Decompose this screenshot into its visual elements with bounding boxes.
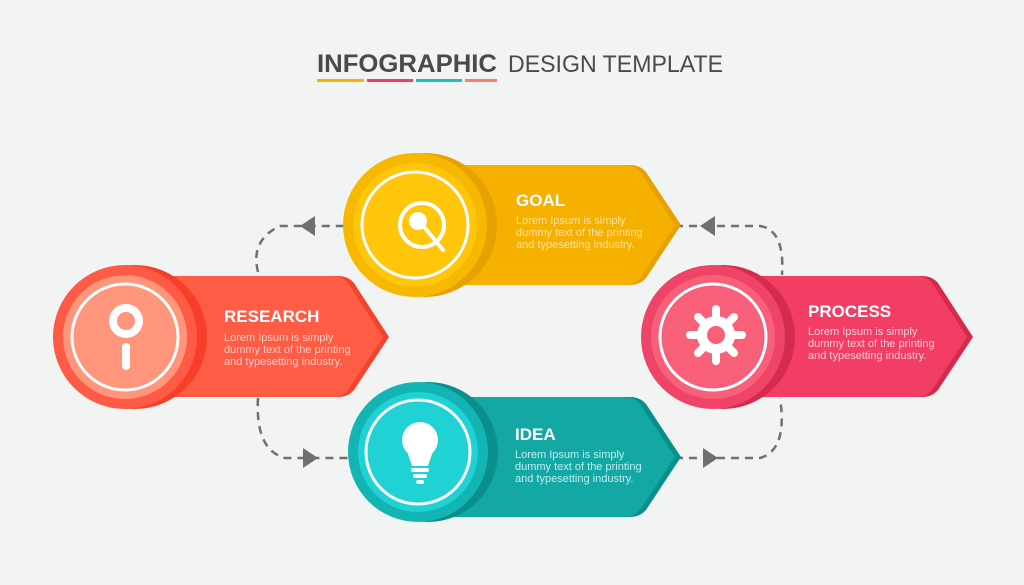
panel: process: Lorem Ipsum is simply bbox=[808, 326, 918, 338]
icon: light bulb bbox=[402, 422, 438, 484]
panel: research: and typesetting industry. bbox=[224, 356, 342, 368]
panel: goal: dummy text of the printing bbox=[516, 227, 643, 239]
title: DESIGN TEMPLATE bbox=[508, 51, 723, 78]
arrowheads bbox=[300, 216, 718, 468]
arrow: dashed connector top-left bbox=[256, 226, 350, 272]
icon: magnifier bbox=[113, 308, 139, 370]
panel: idea: IDEA bbox=[515, 425, 556, 444]
title bbox=[317, 50, 723, 82]
arrow: dashed connector bottom-right bbox=[675, 398, 782, 458]
panel: research: RESEARCH bbox=[224, 307, 319, 326]
arrow: dashed connector top-right bbox=[675, 226, 782, 275]
panel: goal: Lorem Ipsum is simply bbox=[516, 215, 626, 227]
panel: research: dummy text of the printing bbox=[224, 344, 351, 356]
panel: idea bbox=[348, 382, 681, 522]
icon: target bbox=[400, 203, 444, 250]
panel: goal: and typesetting industry. bbox=[516, 239, 634, 251]
panel: idea: Lorem Ipsum is simply bbox=[515, 449, 625, 461]
panel: process: and typesetting industry. bbox=[808, 350, 926, 362]
panel: goal bbox=[343, 153, 681, 297]
panel: research: Lorem Ipsum is simply bbox=[224, 332, 334, 344]
panel: research bbox=[53, 265, 389, 409]
panel: process: dummy text of the printing bbox=[808, 338, 935, 350]
panel: idea: dummy text of the printing bbox=[515, 461, 642, 473]
panel: idea: and typesetting industry. bbox=[515, 473, 633, 485]
arrow: dashed connector bottom-left bbox=[258, 398, 350, 458]
title: INFOGRAPHIC bbox=[317, 50, 497, 78]
icon: gear bbox=[690, 309, 742, 361]
panel: process: PROCESS bbox=[808, 302, 891, 321]
panel: process bbox=[641, 265, 973, 409]
panel: goal: GOAL bbox=[516, 191, 565, 210]
